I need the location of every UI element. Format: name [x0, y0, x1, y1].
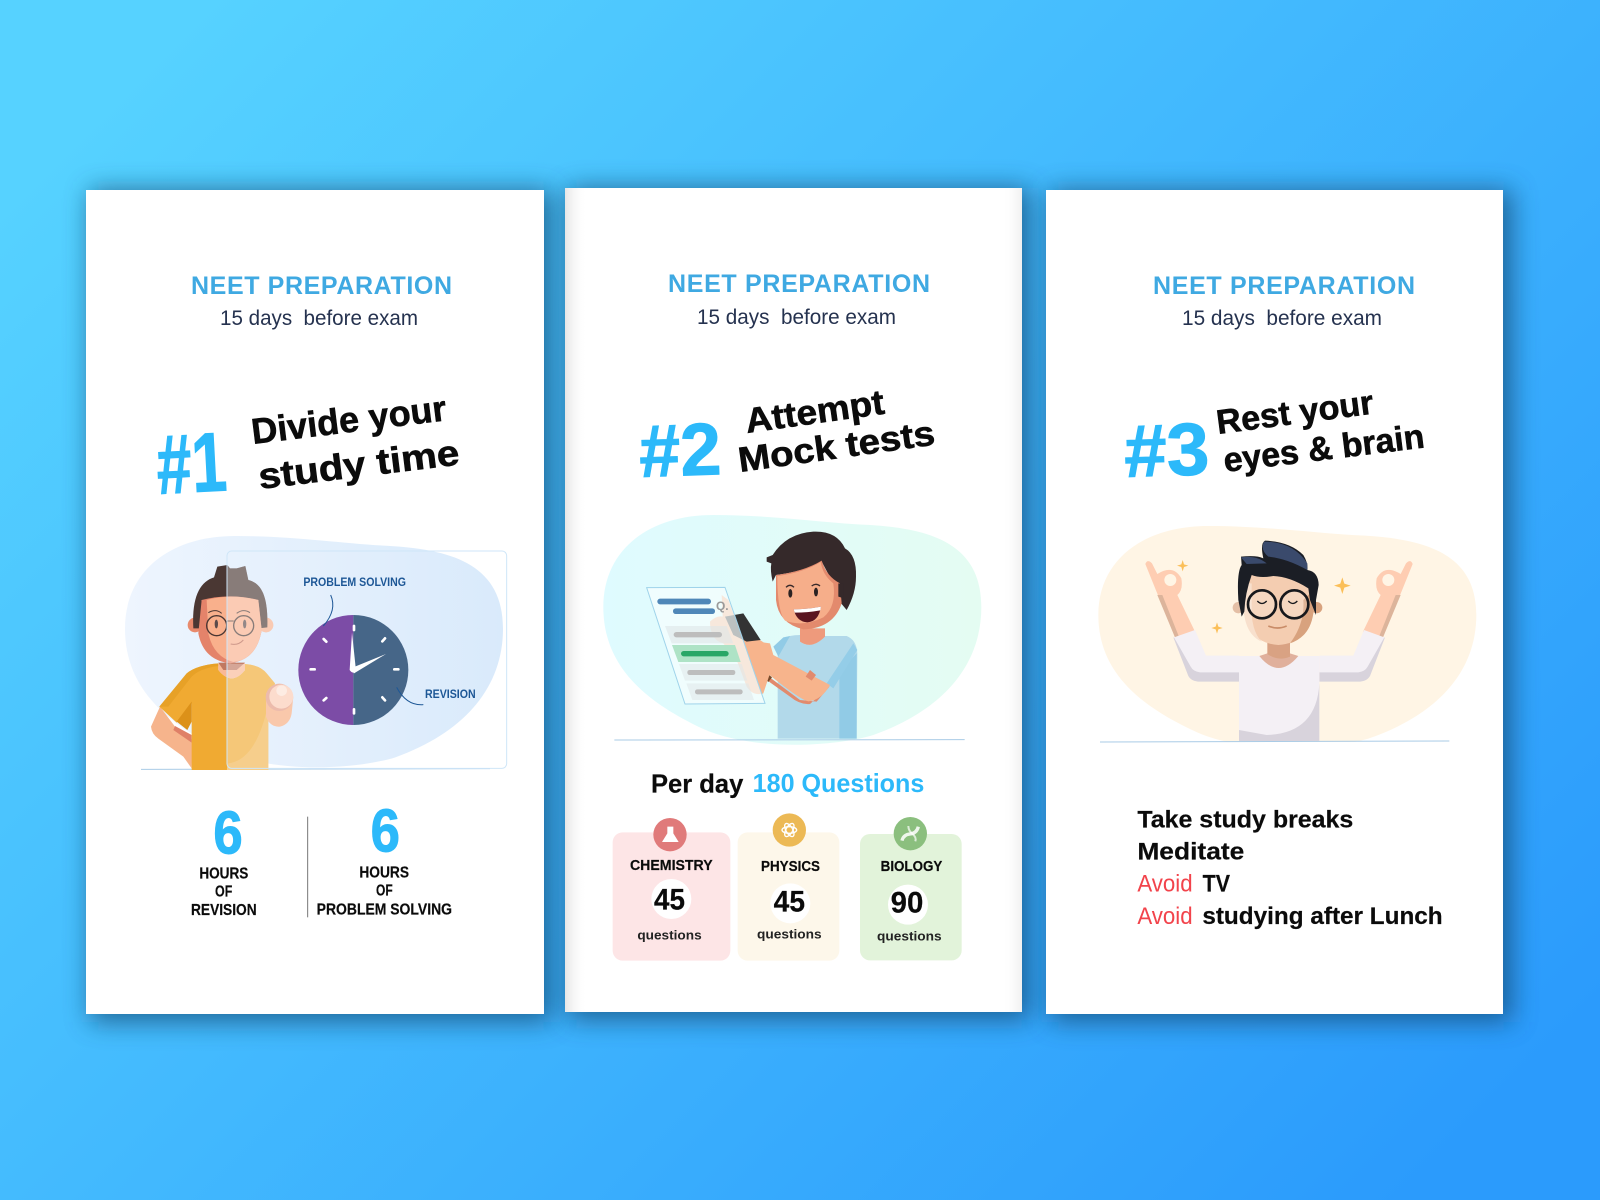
- icon: dna: [894, 817, 927, 850]
- title: attempt mock tests: [736, 383, 937, 480]
- callout: revision: REVISION: [425, 688, 476, 701]
- sparkles: [1177, 560, 1351, 634]
- card: chemistry: questions: [637, 927, 702, 942]
- tips list: TV: [1203, 871, 1230, 898]
- stat: 6 hours of problem solving: [317, 798, 452, 918]
- tips list: studying after Lunch: [1202, 903, 1443, 930]
- panel: divide your study time: [86, 190, 544, 1014]
- stat: 6 hours of problem solving: 6: [371, 798, 400, 865]
- heading: NEET preparation: NEET PREPARATION: [191, 272, 452, 300]
- man: [151, 565, 275, 770]
- background blob: [603, 515, 981, 745]
- background blob: [1098, 526, 1476, 748]
- subheading: 15 days before exam: 15 days before exam: [697, 306, 896, 329]
- subheading: 15 days before exam: 15 days before exam: [1182, 307, 1382, 330]
- illustration: man with clock: [125, 536, 507, 919]
- heading: per day 180 questions: Per day: [651, 769, 744, 799]
- stat: 6 hours of problem solving: OF: [376, 883, 393, 900]
- heading: per day 180 questions: [651, 768, 924, 799]
- tips list: Meditate: [1137, 838, 1244, 865]
- subheading: 15 days before exam: 15 days before exam: [220, 307, 418, 330]
- test paper: Q.: [716, 599, 729, 613]
- tips list: Avoid: [1137, 903, 1193, 930]
- ground line: [614, 738, 965, 741]
- card: biology: questions: [877, 928, 942, 943]
- number: #3: #3: [1123, 407, 1211, 493]
- number: #2: #2: [638, 407, 723, 493]
- ground line: [1100, 739, 1449, 743]
- callout: problem solving: PROBLEM SOLVING: [303, 576, 406, 589]
- tips list: [1137, 806, 1443, 930]
- callout: problem solving: [303, 576, 406, 626]
- title: divide your study time: Divide your: [249, 387, 449, 452]
- clock: half purple, half blue: [298, 615, 408, 725]
- illustration: boy with phone and test paper: [603, 515, 981, 961]
- heading: per day 180 questions: 180 Questions: [753, 768, 924, 798]
- card: chemistry: CHEMISTRY: [630, 858, 713, 874]
- background blob: [125, 536, 503, 767]
- card: physics: 45: [774, 886, 805, 919]
- title: rest your eyes and brain: eyes & brain: [1221, 418, 1426, 480]
- panel: attempt mock tests: [565, 188, 1022, 1012]
- card: biology: 90: [891, 887, 923, 920]
- man: [1145, 541, 1413, 741]
- stat: 6 hours of revision: OF: [215, 884, 232, 901]
- title: rest your eyes and brain: Rest your: [1214, 384, 1376, 442]
- icon: flask: [653, 818, 687, 851]
- title: divide your study time: [249, 387, 461, 497]
- stat: 6 hours of revision: HOURS: [199, 865, 248, 882]
- number: #1: #1: [154, 414, 229, 512]
- heading: NEET preparation: NEET PREPARATION: [668, 270, 930, 298]
- illustration: meditating man: [1097, 526, 1476, 930]
- tips list: Avoid: [1137, 871, 1193, 898]
- hand: [266, 684, 293, 727]
- card: physics: [738, 813, 839, 961]
- stat: 6 hours of problem solving: HOURS: [359, 864, 409, 881]
- stat: 6 hours of problem solving: PROBLEM SOLVING: [317, 901, 452, 918]
- stat: 6 hours of revision: [191, 799, 257, 919]
- card: biology: BIOLOGY: [881, 859, 943, 875]
- stat: 6 hours of revision: REVISION: [191, 902, 257, 919]
- card: physics: questions: [757, 927, 822, 942]
- callout: revision: [397, 687, 476, 705]
- card: chemistry: 45: [654, 883, 685, 916]
- stat: 6 hours of revision: 6: [213, 799, 243, 866]
- title: divide your study time: study time: [256, 432, 461, 497]
- boy: [710, 532, 857, 739]
- panel: rest your eyes and brain: [1046, 190, 1503, 1014]
- heading: NEET preparation: NEET PREPARATION: [1153, 272, 1415, 300]
- test paper: [647, 587, 765, 704]
- ground line: [141, 767, 490, 771]
- glass panel: [227, 551, 507, 768]
- card: physics: PHYSICS: [761, 859, 820, 875]
- card: biology: [860, 817, 962, 960]
- card: chemistry: [613, 818, 730, 961]
- tips list: Take study breaks: [1137, 806, 1353, 833]
- icon: atom: [773, 813, 806, 847]
- title: attempt mock tests: Attempt: [743, 383, 887, 441]
- title: attempt mock tests: Mock tests: [736, 414, 937, 480]
- title: rest your eyes and brain: [1214, 384, 1426, 480]
